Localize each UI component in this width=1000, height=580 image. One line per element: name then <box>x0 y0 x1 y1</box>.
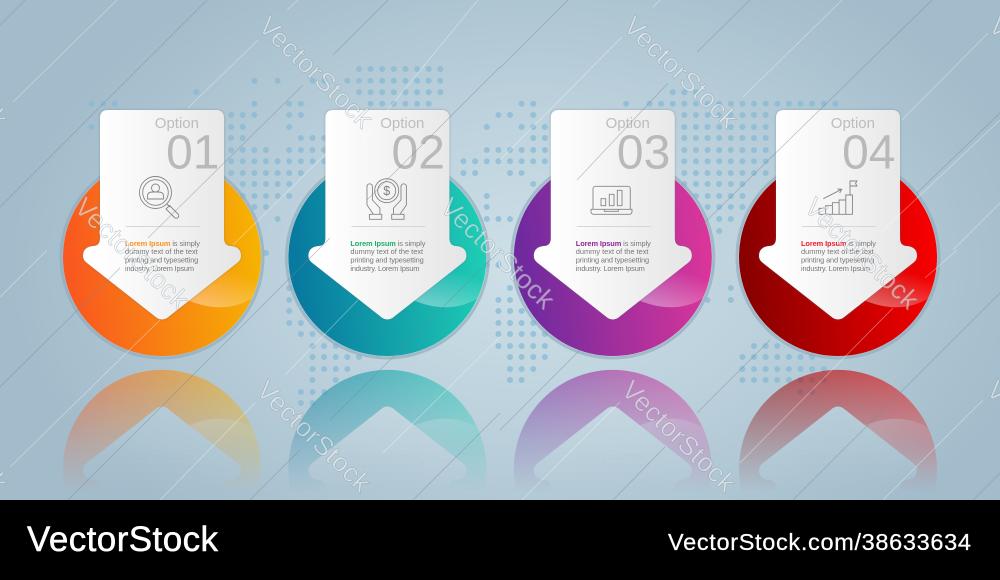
gloss highlight <box>865 273 933 308</box>
icon: laptop with bars <box>591 186 632 214</box>
text block: dummy text of the text <box>576 247 648 256</box>
gloss highlight <box>640 274 708 308</box>
label: option: Option <box>155 115 199 132</box>
arrow card <box>308 110 466 320</box>
panel: option 02 <box>286 110 488 358</box>
icon: person in magnifier <box>140 176 179 218</box>
circle: teal <box>286 156 488 358</box>
circle: red <box>737 156 939 358</box>
text block: printing and typesetting <box>350 256 424 265</box>
gloss highlight <box>414 273 482 308</box>
divider <box>577 226 651 228</box>
icon: growth chart with flag <box>819 181 857 214</box>
text block: industry. Lorem Ipsum <box>125 264 194 273</box>
text block: Lorem Ipsum is simply <box>576 239 651 248</box>
text block <box>801 239 876 273</box>
icon: hands holding coin <box>367 179 406 219</box>
watermarks: VectorStock <box>251 375 377 498</box>
watermarks: VectorStock <box>253 11 379 134</box>
arrow card <box>83 110 241 320</box>
text block: printing and typesetting <box>576 256 649 265</box>
watermarks: VectorStock <box>435 192 561 315</box>
label: option: Option <box>606 115 650 132</box>
circle: orange <box>61 156 263 358</box>
footer url: VectorStock.com/38633634 <box>668 529 971 555</box>
text block: industry. Lorem Ipsum <box>801 264 870 273</box>
text block: Lorem Ipsum is simply <box>350 239 426 248</box>
reflection: option 03 <box>514 370 712 482</box>
text block: industry. Lorem Ipsum <box>350 264 419 273</box>
number: 02: 02 <box>392 126 445 179</box>
text block: printing and typesetting <box>801 256 874 265</box>
footer brand: VectorStock <box>27 520 218 559</box>
watermarks: VectorStock <box>799 192 925 315</box>
panel: option 01 <box>61 110 263 358</box>
number: 04: 04 <box>842 126 896 179</box>
number: 01: 01 <box>166 126 220 179</box>
text block: industry. Lorem Ipsum <box>576 264 645 273</box>
divider <box>351 226 425 228</box>
text block <box>576 239 651 273</box>
reflection of the four circles <box>63 370 938 495</box>
divider <box>126 226 200 228</box>
divider <box>802 226 876 228</box>
watermarks: VectorStock <box>616 375 742 498</box>
text block: dummy text of the text <box>125 247 198 256</box>
footer bar <box>0 500 1000 580</box>
text block <box>350 239 426 273</box>
reflection: option 01 <box>63 370 262 495</box>
text block: printing and typesetting <box>125 256 198 265</box>
watermarks: VectorStock <box>69 192 195 315</box>
text block <box>125 239 200 273</box>
circle: purple <box>512 156 714 358</box>
arrow card <box>534 110 692 320</box>
panel: option 03 <box>512 110 714 358</box>
icon: hands holding coin: $ <box>383 184 390 198</box>
text block: Lorem Ipsum is simply <box>125 239 200 248</box>
text block: Lorem Ipsum is simply <box>801 239 876 248</box>
reflection: option 04 <box>739 370 938 495</box>
text block: dummy text of the text <box>350 247 423 256</box>
world map dot pattern <box>92 69 835 403</box>
text block: dummy text of the text <box>801 247 874 256</box>
arrow card <box>759 110 917 320</box>
panel: option 04 <box>737 110 939 358</box>
number: 03: 03 <box>617 126 670 179</box>
label: option: Option <box>380 115 424 132</box>
gloss highlight <box>189 272 257 308</box>
label: option: Option <box>831 115 875 132</box>
reflection: option 02 <box>288 370 486 482</box>
watermarks: VectorStock <box>618 11 744 134</box>
